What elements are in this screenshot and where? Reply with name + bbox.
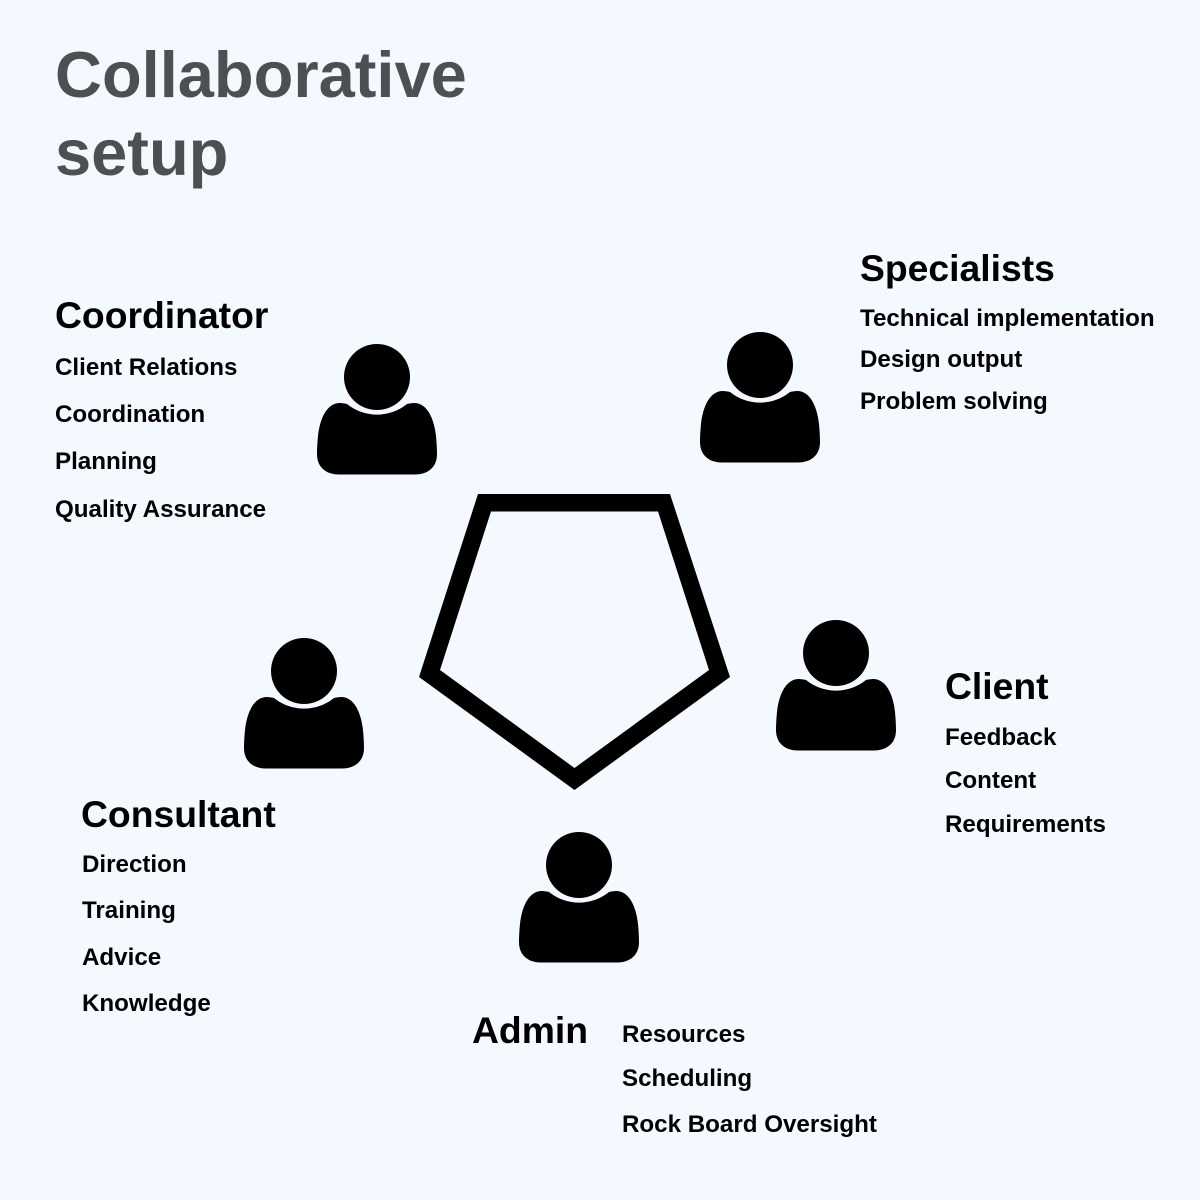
text block: consultant: Consultant [81, 793, 276, 835]
icon: coordinator person [317, 344, 437, 474]
text block: specialists: Technical implementation [860, 305, 1155, 332]
text block: admin: Rock Board Oversight [622, 1111, 877, 1138]
text block: coordinator: Coordinator [55, 294, 268, 336]
text block: consultant: Direction [82, 851, 187, 878]
text block: client: Requirements [945, 811, 1106, 838]
text block: specialists: Specialists [860, 247, 1055, 289]
icon: consultant person [244, 638, 364, 768]
text block: client: Feedback [945, 724, 1057, 751]
text block: admin: Scheduling [622, 1065, 752, 1092]
text block: consultant [81, 793, 276, 1017]
text block: admin [472, 1009, 877, 1138]
text block: coordinator: Planning [55, 448, 157, 475]
text block: specialists [860, 247, 1155, 415]
text block: specialists: Problem solving [860, 388, 1048, 415]
text block: admin: Admin [472, 1009, 588, 1051]
title: setup [55, 116, 228, 189]
text block: client [945, 665, 1106, 838]
title: Collaborative [55, 38, 467, 111]
text block: client: Content [945, 767, 1036, 794]
text block: coordinator: Client Relations [55, 354, 237, 381]
text block: specialists: Design output [860, 346, 1022, 373]
icon: specialists person [700, 332, 820, 462]
text block: admin: Resources [622, 1021, 745, 1048]
text block: consultant: Knowledge [82, 990, 211, 1017]
icon: client person [776, 620, 896, 750]
icon: admin person [519, 832, 639, 962]
text block: coordinator: Quality Assurance [55, 496, 266, 523]
text block: client: Client [945, 665, 1049, 707]
text block: coordinator [55, 294, 268, 523]
text block: consultant: Training [82, 897, 176, 924]
title [55, 38, 467, 189]
icon: central pentagon [419, 494, 730, 790]
text block: consultant: Advice [82, 944, 161, 971]
text block: coordinator: Coordination [55, 401, 205, 428]
